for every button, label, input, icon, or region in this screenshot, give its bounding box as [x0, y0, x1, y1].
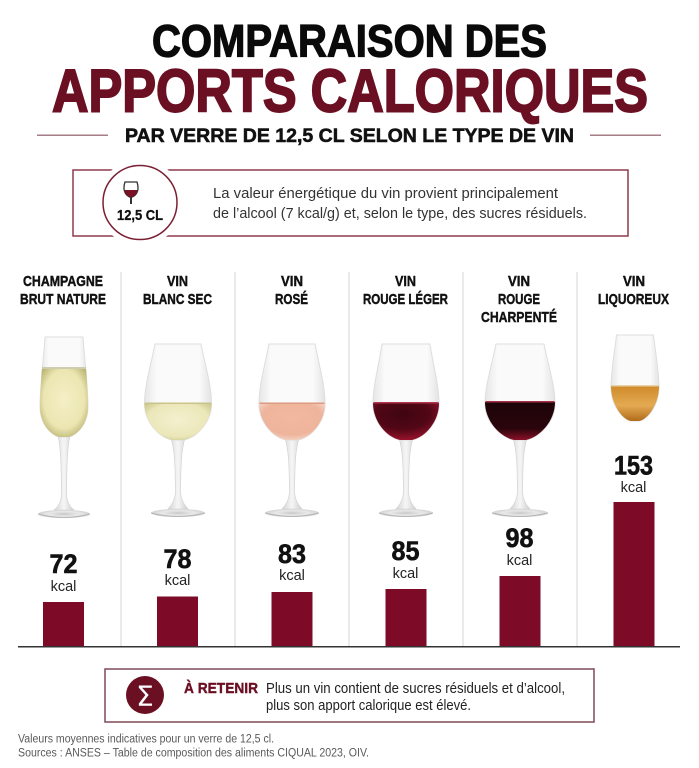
subtitle: PAR VERRE DE 12,5 CL SELON LE TYPE DE VIN [125, 126, 574, 147]
heading: ROUGE LÉGER [363, 291, 448, 308]
icon: white wine glass [144, 344, 212, 517]
column: vin blanc sec [143, 273, 212, 646]
icon: sigma: Σ [136, 680, 154, 712]
heading [20, 273, 106, 308]
bar [272, 592, 312, 646]
heading [275, 273, 308, 308]
heading: VIN [623, 273, 645, 290]
calorie value: kcal [51, 579, 76, 595]
calorie value [278, 539, 306, 584]
bar [157, 596, 198, 646]
column: champagne [20, 273, 106, 646]
heading: CHARPENTÉ [481, 309, 557, 326]
calorie value [50, 549, 78, 595]
takeaway text: Plus un vin contient de sucres résiduels et d’alcool, [266, 681, 565, 697]
heading: BRUT NATURE [20, 291, 106, 308]
calorie value: 83 [278, 539, 306, 569]
calorie value: kcal [165, 573, 190, 589]
calorie value: 85 [392, 536, 420, 566]
column: vin rosé [259, 273, 325, 646]
bar [43, 602, 84, 646]
footnote [18, 734, 369, 760]
calorie value [614, 450, 653, 496]
heading: VIN [508, 273, 530, 290]
calorie value: kcal [279, 568, 305, 584]
bar [500, 576, 540, 646]
calorie value: kcal [507, 553, 532, 569]
calorie value: kcal [621, 480, 646, 496]
bar [614, 502, 654, 646]
icon: light red glass [373, 344, 439, 517]
calorie value [506, 523, 534, 569]
calorie value: 72 [50, 549, 78, 579]
takeaway text: plus son apport calorique est élevé. [266, 698, 471, 714]
heading: ROUGE [498, 291, 540, 308]
bar [386, 589, 426, 646]
icon: champagne flute [38, 337, 90, 518]
heading: VIN [167, 273, 188, 290]
heading: LIQUOREUX [598, 291, 669, 308]
footnote: Sources : ANSES – Table de composition des aliments CIQUAL 2023, OIV. [18, 748, 369, 760]
heading [363, 273, 448, 308]
icon: 12,5 cl glass badge: 12,5 CL [117, 207, 163, 224]
heading [598, 273, 669, 308]
panel: à retenir [105, 669, 594, 722]
calorie value: 153 [614, 450, 653, 480]
icon: sigma [126, 676, 164, 714]
icon: full-bodied red glass [485, 344, 555, 517]
title line 1: COMPARAISON DES [152, 16, 547, 66]
heading: ROSÉ [275, 291, 308, 308]
heading: BLANC SEC [143, 291, 212, 308]
heading: CHAMPAGNE [23, 273, 103, 290]
intro text: La valeur énergétique du vin provient principalement [213, 186, 558, 202]
heading: VIN [395, 273, 416, 290]
heading [143, 273, 212, 308]
intro text [213, 186, 587, 222]
column: vin rouge charpenté [481, 273, 557, 646]
icon: 12,5 cl glass badge [103, 166, 177, 240]
calorie value: 98 [506, 523, 534, 553]
calorie value [392, 536, 420, 582]
takeaway text [266, 681, 565, 714]
icon: sweet wine glass [611, 335, 659, 421]
icon: rosé glass [259, 344, 325, 517]
column: vin liquoreux [598, 273, 669, 646]
calorie value [164, 544, 192, 589]
intro text: de l’alcool (7 kcal/g) et, selon le type, des sucres résiduels. [213, 206, 587, 222]
takeaway heading: À RETENIR [184, 680, 258, 697]
heading: VIN [281, 273, 303, 290]
calorie value: kcal [393, 566, 418, 582]
heading [481, 273, 557, 326]
title [52, 16, 648, 124]
calorie value: 78 [164, 544, 192, 574]
panel: intro [73, 160, 628, 246]
column: vin rouge léger [363, 273, 448, 646]
footnote: Valeurs moyennes indicatives pour un verre de 12,5 cl. [18, 734, 274, 746]
